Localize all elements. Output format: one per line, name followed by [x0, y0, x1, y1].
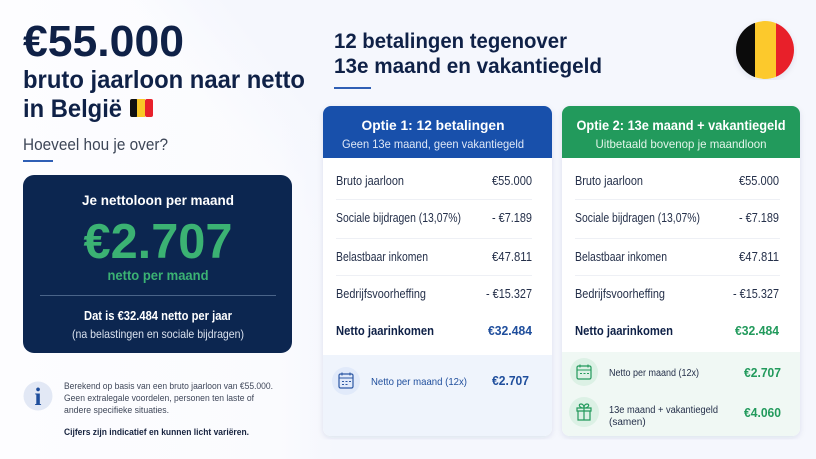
option 1 table: €47.811 — [492, 250, 532, 264]
disclaimer text: Geen extralegale voordelen, personen ten laste of — [64, 393, 254, 403]
title: €55.000 — [23, 17, 184, 66]
icon: info: i — [35, 384, 42, 411]
option 1 table: Belastbaar inkomen — [336, 250, 428, 264]
option 2 table: Sociale bijdragen (13,07%) — [575, 211, 700, 225]
comparison heading: 12 betalingen tegenover — [334, 30, 567, 53]
bonus label — [609, 405, 718, 428]
option 1 table: Bedrijfsvoorheffing — [336, 287, 426, 301]
option 2 table: - €7.189 — [739, 211, 779, 225]
panel: net salary — [23, 175, 292, 353]
option 2 table: Bedrijfsvoorheffing — [575, 287, 665, 301]
option 2 table: €32.484 — [735, 324, 779, 338]
panel heading: Je nettoloon per maand — [82, 192, 234, 208]
option 1 table: - €7.189 — [492, 211, 532, 225]
disclaimer text — [64, 381, 273, 437]
title: bruto jaarloon naar netto — [23, 66, 305, 94]
option 1 table: €32.484 — [488, 324, 532, 338]
bonus label: 13e maand + vakantiegeld — [609, 405, 718, 416]
option 1 table: - €15.327 — [486, 287, 532, 301]
option 2 summary — [562, 352, 800, 436]
option 1 header — [323, 106, 552, 158]
panel: option 1 — [323, 106, 552, 436]
option 2 table: Belastbaar inkomen — [575, 250, 667, 264]
option 2 table: Netto jaarinkomen — [575, 324, 673, 338]
option 1 table: Bruto jaarloon — [336, 174, 404, 188]
title: in België — [23, 95, 122, 123]
option 1 table: Sociale bijdragen (13,07%) — [336, 211, 461, 225]
option 2 summary: €2.707 — [744, 366, 781, 380]
icon: info — [24, 382, 52, 411]
option 1 monthly summary: €2.707 — [492, 374, 529, 388]
option 1 table: €55.000 — [492, 174, 532, 188]
panel: option 2 — [562, 106, 800, 436]
option 2 summary: €4.060 — [744, 406, 781, 420]
option 2 table: €55.000 — [739, 174, 779, 188]
option 1 table — [336, 174, 532, 338]
disclaimer text: andere specifieke situaties. — [64, 405, 169, 415]
option 2 table — [575, 174, 780, 338]
option 1 header: Optie 1: 12 betalingen — [362, 117, 504, 133]
option 2 summary: Netto per maand (12x) — [609, 368, 699, 379]
subtitle: Hoeveel hou je over? — [23, 135, 168, 154]
icon: gift — [569, 397, 599, 427]
yearly note: (na belastingen en sociale bijdragen) — [72, 327, 244, 341]
option 2 table: Bruto jaarloon — [575, 174, 643, 188]
option 2 table: - €15.327 — [733, 287, 779, 301]
icon: small Belgian flag — [130, 99, 153, 117]
comparison heading: 13e maand en vakantiegeld — [334, 55, 602, 78]
disclaimer text: Berekend op basis van een bruto jaarloon van €55.000. — [64, 381, 273, 391]
net monthly amount: €2.707 — [84, 215, 232, 269]
disclaimer text: Cijfers zijn indicatief en kunnen licht variëren. — [64, 427, 249, 437]
yearly net: Dat is €32.484 netto per jaar — [84, 309, 232, 323]
bonus label: (samen) — [609, 417, 646, 428]
icon: calendar — [332, 367, 360, 395]
option 2 header: Optie 2: 13e maand + vakantiegeld — [576, 117, 786, 133]
icon: round Belgian flag — [736, 21, 794, 79]
icon: calendar — [570, 358, 598, 386]
option 1 monthly summary: Netto per maand (12x) — [371, 376, 467, 388]
option 1 header: Geen 13e maand, geen vakantiegeld — [342, 137, 524, 151]
title — [23, 17, 305, 123]
option 2 header — [562, 106, 800, 158]
option 1 table: Netto jaarinkomen — [336, 324, 434, 338]
option 1 monthly summary — [323, 355, 552, 436]
option 2 table: €47.811 — [739, 250, 779, 264]
option 2 header: Uitbetaald bovenop je maandloon — [596, 137, 766, 151]
comparison heading — [334, 30, 602, 78]
net monthly caption: netto per maand — [108, 267, 208, 283]
